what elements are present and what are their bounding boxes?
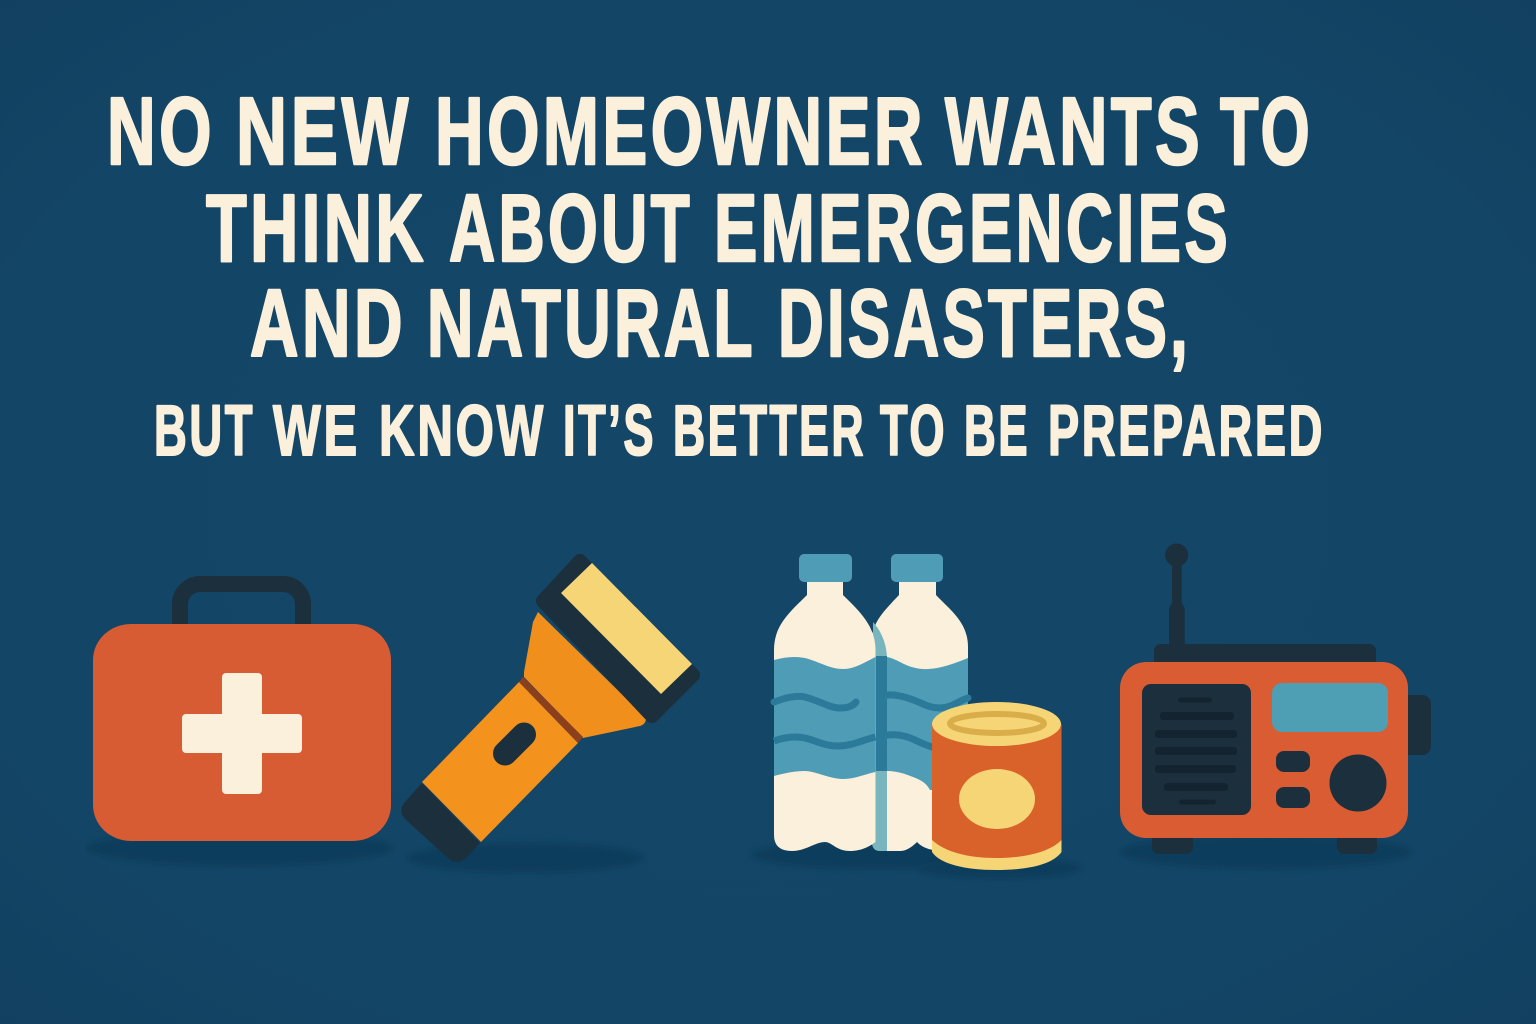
switch	[505, 734, 524, 754]
icon: radio	[1120, 544, 1431, 869]
flashlight body	[422, 682, 578, 842]
right bottle	[866, 554, 968, 851]
subheading: KNOW	[379, 392, 546, 471]
headline line 1: NEW	[236, 78, 412, 185]
headline line 2: THINK	[206, 175, 427, 282]
icon: flashlight	[401, 561, 693, 873]
lens	[561, 563, 692, 694]
lens housing	[543, 561, 693, 716]
headline line 2: ABOUT	[449, 175, 693, 282]
left bottle	[774, 554, 876, 851]
speaker grille	[1142, 684, 1251, 815]
subheading: BE	[964, 392, 1030, 471]
buttons	[1276, 751, 1310, 772]
icon: food can	[918, 702, 1082, 879]
headline line 1: NO	[107, 78, 215, 185]
headline line 1: HOMEOWNER	[435, 78, 926, 185]
icon: water bottles	[752, 554, 1008, 869]
tail cap	[401, 783, 480, 862]
dial	[1330, 754, 1386, 812]
flashlight head	[524, 612, 646, 738]
icon: first aid kit	[87, 584, 393, 866]
collar band	[519, 677, 583, 743]
subheading: BETTER	[673, 392, 866, 471]
antenna	[1169, 560, 1185, 650]
display	[1272, 683, 1388, 732]
subheading: WE	[273, 392, 360, 471]
subheading: IT’S	[563, 392, 656, 471]
headline line 3: AND	[250, 270, 406, 377]
subheading: BUT	[154, 392, 255, 471]
headline line 3	[250, 270, 1191, 377]
headline	[107, 78, 1313, 377]
subheading: PREPARED	[1048, 392, 1325, 471]
divider strip	[872, 622, 887, 851]
headline line 3: DISASTERS,	[778, 270, 1191, 377]
headline line 2	[206, 175, 1231, 282]
subheading: TO	[880, 392, 947, 471]
headline line 1	[107, 78, 1313, 185]
headline line 1: TO	[1220, 78, 1313, 185]
headline line 2: EMERGENCIES	[714, 175, 1231, 282]
headline line 1: WANTS	[945, 78, 1203, 185]
subheading	[154, 392, 1325, 471]
headline line 3: NATURAL	[427, 270, 756, 377]
